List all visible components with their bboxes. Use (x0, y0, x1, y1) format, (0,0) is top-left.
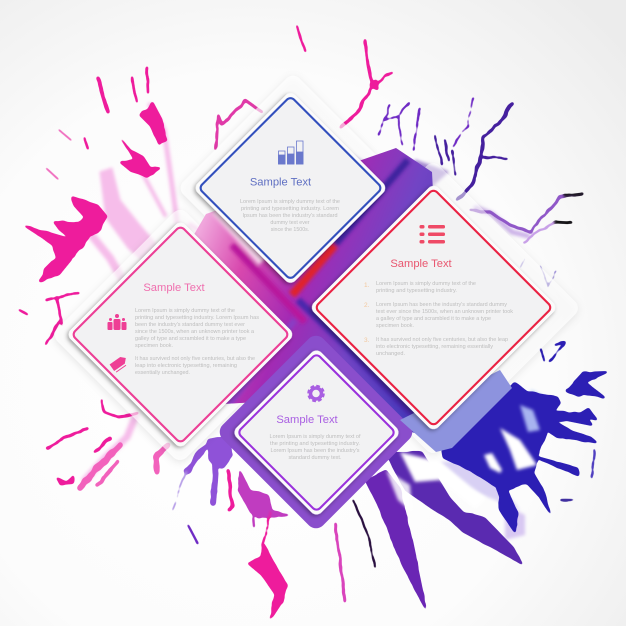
heading: Sample Text (143, 282, 206, 294)
icon: people (108, 314, 126, 330)
text block: Lorem Ipsum is simply dummy text of the (135, 308, 235, 314)
text block: essentially unchanged. (135, 370, 190, 376)
numbered list: 3. (364, 337, 370, 344)
ink splash: blue (443, 342, 607, 532)
numbered list: text ever since the 1500s, when an unknown printer took (376, 309, 513, 315)
numbered list: It has survived not only five centuries, but also the leap (376, 337, 508, 343)
icon: gear (309, 386, 323, 400)
text block: been the industry's standard dummy text ever (135, 322, 245, 328)
numbered list: 1. (364, 282, 370, 289)
text block: dummy text ever (270, 220, 310, 226)
text block: printing and typesetting industry. Lorem Ipsum has (135, 315, 259, 321)
backing plates (51, 72, 581, 464)
text block: the printing and typesetting industry. (270, 441, 360, 447)
card: blue (193, 90, 388, 286)
card: pink (66, 220, 295, 449)
numbered list: specimen book. (376, 323, 414, 329)
numbered list: Lorem Ipsum has been the industry's standard dummy (376, 302, 507, 308)
heading: Sample Text (276, 414, 339, 426)
icon: bar chart (278, 141, 303, 164)
halo around purple card (216, 332, 416, 532)
numbered list: printing and typesetting industry. (376, 288, 457, 294)
text block: Lorem Ipsum has been the industry's (270, 448, 360, 454)
heading: Sample Text (250, 176, 312, 188)
ink splash: violet (172, 97, 583, 612)
text block (240, 199, 340, 233)
text block: specimen book. (135, 343, 173, 349)
ink splash: magenta (19, 25, 392, 620)
text block (135, 308, 259, 376)
text block: printing and typesetting industry. Lorem (241, 206, 340, 212)
text block: since the 1500s. (271, 227, 309, 233)
numbered list: into electronic typesetting, remaining essentially (376, 344, 493, 350)
ink splash: pale wash (84, 105, 548, 540)
text block: since the 1500s, when an unknown printer took a (135, 329, 254, 335)
icon: tag (110, 355, 129, 373)
central ink pool between the cards (194, 148, 433, 433)
text block: It has survived not only five centuries, but also the (135, 356, 255, 362)
text block (270, 434, 361, 461)
text block: Lorem Ipsum is simply dummy text of (270, 434, 361, 440)
numbered list: 2. (364, 302, 370, 309)
card: purple (232, 348, 401, 517)
heading: Sample Text (390, 258, 453, 270)
text block: galley of type and scrambled it to make a type (135, 336, 246, 342)
ink holes (386, 405, 540, 512)
card: red (309, 183, 558, 432)
numbered list: unchanged. (376, 351, 405, 357)
numbered list: a galley of type and scrambled it to make a type (376, 316, 491, 322)
text block: Lorem Ipsum is simply dummy text of the (240, 199, 340, 205)
periwinkle band below red card (400, 370, 512, 452)
text block: Ipsum has been the industry's standard (242, 213, 338, 219)
numbered list: Lorem Ipsum is simply dummy text of the (376, 281, 476, 287)
text block: standard dummy text. (288, 455, 342, 461)
numbered list (364, 281, 513, 357)
text block: leap into electronic typesetting, remaining (135, 363, 237, 369)
icon: list (420, 225, 445, 244)
